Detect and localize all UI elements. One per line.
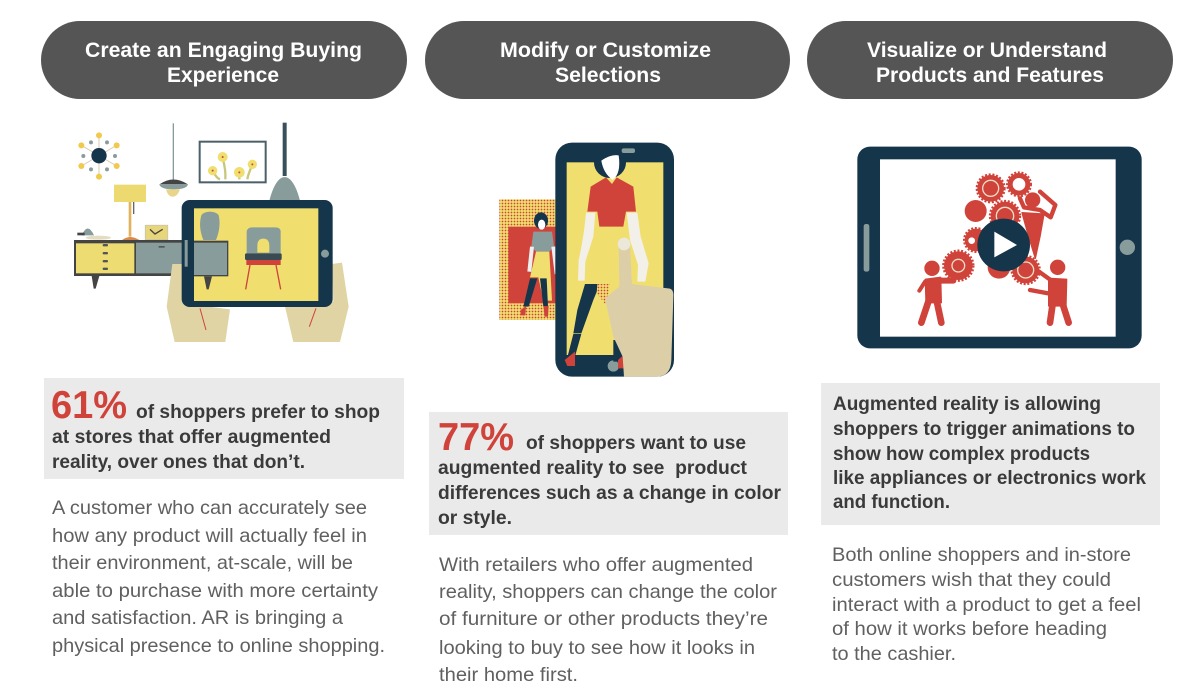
heading pill: engaging buying experience: Create an Engaging Buying bbox=[85, 38, 362, 62]
text block: engaging experience description bbox=[52, 497, 385, 657]
heading pill: modify or customize bbox=[425, 21, 790, 99]
text block: visualization description: of how it works before heading bbox=[832, 618, 1107, 640]
callout: 61% statistic bbox=[44, 378, 404, 479]
heading pill: visualize or understand: Products and Features bbox=[876, 63, 1104, 87]
callout: 77% statistic: differences such as a change in color bbox=[438, 483, 782, 504]
callout: augmented reality animations bbox=[821, 383, 1160, 525]
heading pill: modify or customize: Modify or Customize bbox=[500, 38, 711, 62]
icon: pointing hand bbox=[605, 238, 673, 377]
text block: engaging experience description: and satisfaction. AR is bringing a bbox=[52, 607, 343, 629]
illustration: phone with clothing try-on bbox=[499, 143, 674, 377]
panel: engaging buying experience bbox=[41, 21, 407, 657]
text block: visualization description: customers wish that they could bbox=[832, 569, 1111, 591]
text block: engaging experience description: their environment, at-scale, will be bbox=[52, 552, 353, 574]
icon: tablet with AR room bbox=[182, 200, 333, 307]
icon: small desk clock and ornament bbox=[77, 225, 168, 240]
icon: floor lamp bbox=[269, 123, 300, 201]
icon: sideboard bbox=[74, 240, 184, 289]
panel: modify or customize selections bbox=[425, 21, 790, 686]
callout: 61% statistic: at stores that offer augmented bbox=[52, 427, 331, 448]
icon: table lamp bbox=[114, 185, 146, 240]
illustration: room viewed through tablet bbox=[74, 123, 349, 342]
icon: play button bbox=[977, 219, 1030, 271]
text block: engaging experience description: how any product will actually feel in bbox=[52, 525, 367, 547]
text block: customization description bbox=[439, 554, 778, 686]
text block: customization description: looking to buy to see how it looks in bbox=[439, 637, 755, 659]
callout: 77% statistic: of shoppers want to use bbox=[526, 433, 746, 454]
panel: visualize or understand products bbox=[807, 21, 1173, 665]
callout: augmented reality animations: show how complex products bbox=[833, 444, 1090, 465]
heading pill: modify or customize: Selections bbox=[555, 63, 661, 87]
callout: 61% statistic: of shoppers prefer to shop bbox=[136, 402, 380, 423]
text block: visualization description: to the cashier. bbox=[832, 643, 956, 665]
heading pill: engaging buying experience: Experience bbox=[167, 63, 279, 87]
heading pill: engaging buying experience bbox=[41, 21, 407, 99]
callout: 77% statistic: 77% bbox=[438, 416, 514, 459]
text block: visualization description: Both online shoppers and in-store bbox=[832, 544, 1131, 566]
callout: augmented reality animations: like appliances or electronics work bbox=[833, 468, 1146, 489]
text block: customization description: their home first. bbox=[439, 664, 578, 686]
text block: customization description: reality, shoppers can change the color bbox=[439, 581, 778, 603]
heading pill: visualize or understand bbox=[807, 21, 1173, 99]
heading pill: visualize or understand: Visualize or Understand bbox=[867, 38, 1107, 62]
callout: 77% statistic: augmented reality to see product bbox=[438, 458, 748, 479]
icon: small fashion card bbox=[499, 199, 557, 320]
icon: gears bbox=[943, 172, 1040, 284]
text block: engaging experience description: A customer who can accurately see bbox=[52, 497, 367, 519]
text block: customization description: of furniture or other products they’re bbox=[439, 608, 768, 630]
callout: 61% statistic: reality, over ones that don’t. bbox=[52, 452, 305, 473]
illustration: tablet with gears animation bbox=[857, 147, 1142, 348]
text block: visualization description: interact with a product to get a feel bbox=[832, 594, 1141, 616]
icon: framed flower picture bbox=[200, 142, 266, 182]
text block: engaging experience description: able to purchase with more certainty bbox=[52, 580, 378, 602]
text block: customization description: With retailers who offer augmented bbox=[439, 554, 753, 576]
icon: wall clock bbox=[78, 132, 120, 180]
callout: augmented reality animations: Augmented reality is allowing bbox=[833, 394, 1101, 415]
icon: tablet frame bbox=[857, 147, 1142, 348]
icon: hands holding tablet bbox=[167, 263, 349, 342]
callout: 77% statistic: or style. bbox=[438, 508, 512, 529]
callout: augmented reality animations: shoppers to trigger animations to bbox=[833, 419, 1135, 440]
callout: 61% statistic: 61% bbox=[51, 384, 127, 427]
icon: pendant lamp bbox=[159, 123, 188, 197]
callout: 77% statistic bbox=[429, 412, 788, 535]
text block: visualization description bbox=[832, 544, 1141, 665]
icon: workers pushing gears bbox=[919, 192, 1069, 323]
callout: augmented reality animations: and function. bbox=[833, 492, 950, 513]
icon: woman figure in red top bbox=[565, 147, 649, 368]
text block: engaging experience description: physical presence to online shopping. bbox=[52, 635, 385, 657]
icon: smartphone bbox=[555, 143, 674, 377]
